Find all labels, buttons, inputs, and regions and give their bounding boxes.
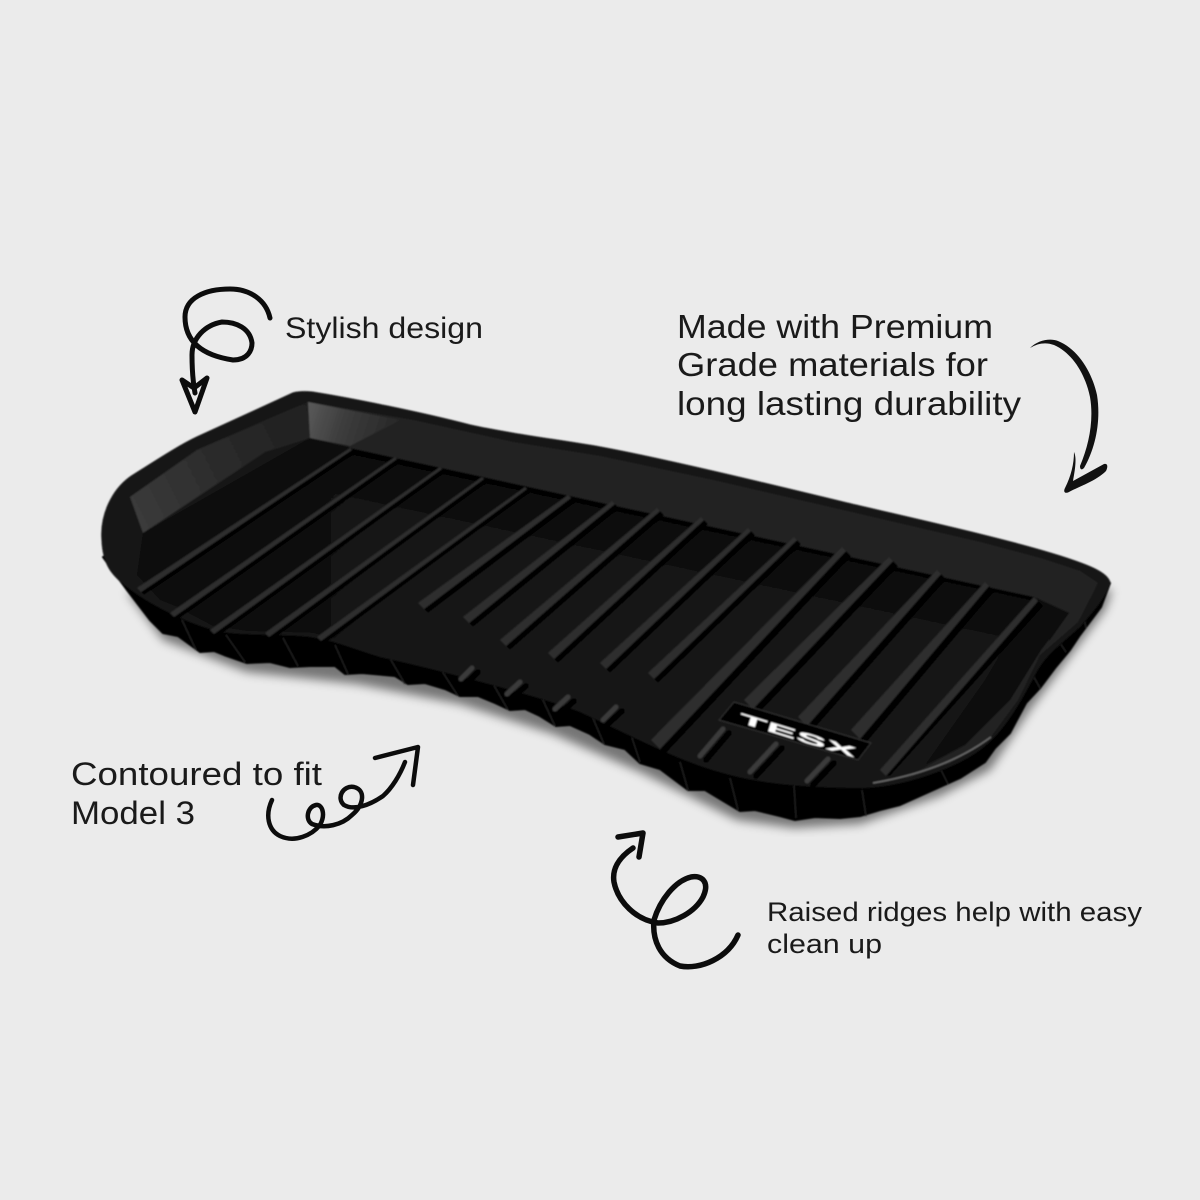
label: contoured fit: Contoured to fit <box>71 756 322 792</box>
arrow: raised ridges <box>614 833 738 967</box>
label: raised ridges <box>767 897 1143 959</box>
label: raised ridges: clean up <box>767 929 882 959</box>
tray floor <box>137 438 1069 784</box>
left corner wall <box>130 402 310 533</box>
logo text: TESX <box>737 710 861 761</box>
tray drop shadow <box>127 560 1112 828</box>
floor ridges <box>137 448 1043 776</box>
callout: stylish design <box>182 289 483 412</box>
callout: contoured fit <box>71 747 418 839</box>
label: premium materials <box>677 308 1022 422</box>
label: contoured fit: Model 3 <box>71 795 195 831</box>
arrow: stylish design <box>182 289 270 412</box>
arrow: contoured fit <box>268 747 418 839</box>
arrow: premium materials <box>1030 340 1107 493</box>
label: contoured fit <box>71 756 322 831</box>
tray lower skirt with ribs <box>103 500 1110 820</box>
callout: raised ridges <box>614 833 1143 967</box>
label: premium materials: Made with Premium <box>677 308 993 345</box>
product: black trunk tray <box>102 392 1112 828</box>
logo badge <box>719 702 871 761</box>
label: stylish design: Stylish design <box>285 312 483 345</box>
label: raised ridges: Raised ridges help with easy <box>767 897 1143 927</box>
lit corner patch <box>308 402 400 446</box>
right wall <box>905 583 1098 779</box>
ridge shadows <box>141 450 1043 776</box>
back wall <box>308 402 1098 613</box>
tray outer rim <box>102 392 1110 788</box>
callout: premium materials <box>677 308 1107 493</box>
ridge highlights <box>137 448 1038 776</box>
rim highlight <box>873 737 991 783</box>
label: premium materials: long lasting durability <box>677 385 1022 422</box>
dark rear channels of floor <box>293 448 1069 653</box>
short front ridges <box>461 668 834 785</box>
label: premium materials: Grade materials for <box>677 346 988 383</box>
